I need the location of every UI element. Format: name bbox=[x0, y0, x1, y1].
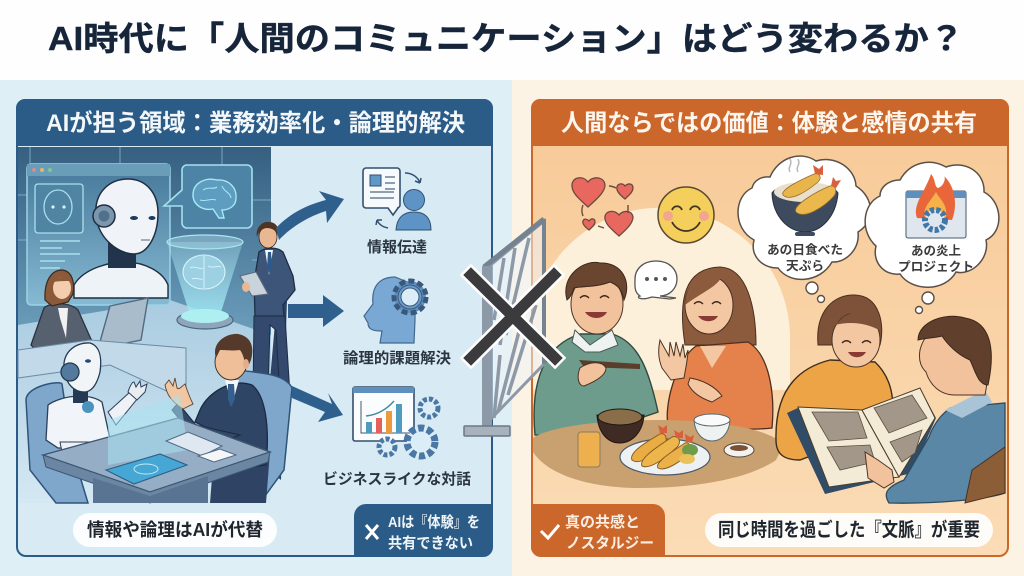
callout: AI cannot share experience: AIは『体験』を bbox=[388, 514, 480, 531]
metal gate bbox=[464, 219, 544, 436]
rice bowl bbox=[694, 420, 730, 441]
barrier gate with X bbox=[464, 219, 555, 436]
callout: AI cannot share experience bbox=[354, 504, 492, 556]
arrow: to dialogue bbox=[292, 386, 343, 422]
thought cloud: tempura memory: あの日食べた bbox=[767, 242, 843, 257]
thought cloud: tempura memory: 天ぷら bbox=[786, 259, 824, 273]
juice glass bbox=[578, 432, 600, 467]
desk partition bbox=[18, 340, 186, 400]
hologram screen with robot bbox=[27, 164, 170, 305]
tempura plate bbox=[620, 439, 710, 475]
couple: laughing woman bbox=[659, 267, 773, 429]
left panel heading bbox=[16, 99, 493, 146]
sauce dish bbox=[724, 443, 754, 457]
seated woman at desk bbox=[31, 270, 94, 355]
seated robot bbox=[26, 343, 147, 503]
label: information transfer: 情報伝達 bbox=[367, 238, 427, 256]
couple: laughing man bbox=[534, 262, 658, 437]
label: logical problem solving: 論理的課題解決 bbox=[343, 349, 451, 367]
thought cloud: tempura memory bbox=[738, 156, 871, 279]
left panel heading: AIが担う領域：業務効率化・論理的解決 bbox=[46, 109, 465, 137]
thought cloud: flaming project memory bbox=[865, 162, 999, 287]
panel: human value bbox=[531, 99, 1009, 556]
speech bubble with dots bbox=[635, 261, 677, 299]
caption: information and logic: 情報や論理はAIが代替 bbox=[87, 519, 263, 540]
thought cloud: flaming project memory: あの炎上 bbox=[911, 244, 961, 258]
caption: shared context: 同じ時間を過ごした『文脈』が重要 bbox=[718, 518, 980, 541]
panel: AI domain bbox=[16, 99, 493, 556]
hologram brain cone bbox=[167, 235, 243, 329]
photo album bbox=[787, 388, 936, 494]
caption: information and logic bbox=[73, 513, 277, 547]
arrow: to logic bbox=[288, 295, 344, 327]
X mark bbox=[471, 275, 555, 358]
right panel heading bbox=[531, 99, 1009, 146]
callout: true empathy and nostalgia: ノスタルジー bbox=[566, 535, 654, 552]
title band: AI時代に「人間のコミュニケーション」はどう変わるか？ bbox=[48, 20, 964, 57]
icon: hearts bbox=[572, 178, 633, 236]
arrow: to information bbox=[276, 191, 344, 240]
tempura bowl icon bbox=[772, 159, 841, 236]
label: business-like dialogue: ビジネスライクな対話 bbox=[323, 470, 471, 488]
soup bowl bbox=[597, 415, 644, 443]
burning window icon bbox=[906, 174, 966, 238]
callout: true empathy and nostalgia: 真の共感と bbox=[565, 513, 640, 531]
seated man bbox=[165, 334, 292, 503]
icon: chart and gears bbox=[353, 387, 438, 456]
icon: smiling face bbox=[658, 187, 714, 243]
thought bubble dots bbox=[806, 282, 934, 314]
left half background bbox=[0, 80, 512, 576]
brain speech bubble bbox=[164, 165, 252, 228]
title band bbox=[0, 0, 1024, 80]
callout: true empathy and nostalgia bbox=[531, 504, 665, 556]
right half background bbox=[512, 80, 1024, 576]
older woman bbox=[776, 295, 893, 460]
computer monitor bbox=[98, 298, 148, 366]
cream spotlight behind couple bbox=[533, 208, 790, 390]
callout: AI cannot share experience: 共有できない bbox=[388, 535, 473, 552]
dining table with tempura meal bbox=[533, 409, 790, 488]
office scene illustration bbox=[18, 147, 295, 503]
caption: shared context bbox=[705, 513, 993, 547]
icon: head with gear bbox=[364, 277, 426, 343]
man in blue shirt bbox=[865, 316, 1005, 503]
icon: information transfer bbox=[363, 168, 431, 230]
standing man with tablet bbox=[240, 222, 295, 480]
right panel heading: 人間ならではの価値：体験と感情の共有 bbox=[561, 110, 977, 137]
thought cloud: flaming project memory: プロジェクト bbox=[898, 260, 974, 274]
meeting desk with hologram tablet bbox=[43, 395, 270, 503]
